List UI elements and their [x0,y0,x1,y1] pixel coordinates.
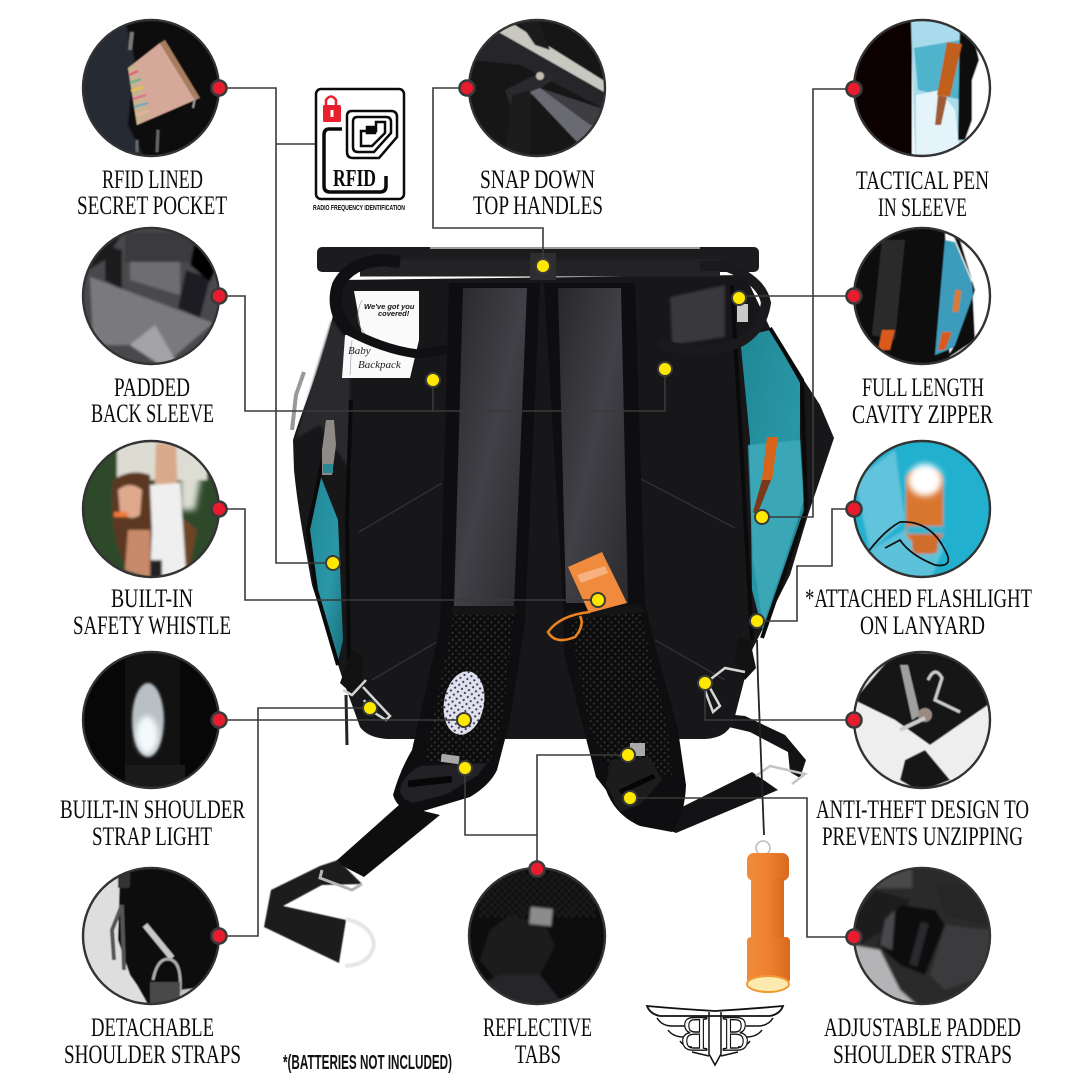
caption: attached flashlight: ON LANYARD [860,611,985,640]
caption: snap down top handles [473,165,603,220]
caption: adjustable padded shoulder straps [824,1013,1021,1069]
caption: snap down top handles: TOP HANDLES [473,191,603,220]
light teal lining [748,440,804,625]
caption: RFID lined secret pocket [77,165,227,220]
caption: attached flashlight [805,584,1032,640]
padded back sleeve connector [219,296,665,411]
buckle left [400,754,487,803]
caption: anti-theft design [816,795,1029,851]
handle loop left [336,260,400,331]
yellow markers on backpack [326,259,769,805]
anti-theft connector [705,683,854,720]
reflective tabs connector [465,755,628,869]
RFID frame bracket [324,129,386,192]
caption: tactical pen: TACTICAL PEN [856,166,989,195]
caption: cavity zipper: FULL LENGTH [862,373,984,402]
teal pocket right [740,330,804,632]
wings [647,1006,783,1016]
shoulder light connector [219,719,464,721]
right strap [544,283,686,832]
left mesh pocket [425,612,514,762]
RFID connector [219,88,333,563]
hang tag [342,291,419,378]
caption: adjustable padded shoulder straps: SHOULDER STRAPS [833,1040,1012,1069]
caption: detachable shoulder straps [64,1013,241,1069]
handle center band [360,260,720,276]
tactical pen connector [762,89,854,517]
snap handles connector [433,88,543,266]
hang tag: Backpack [358,359,402,371]
photo circle: tactical pen [852,18,994,160]
photo circle: reflective tabs [466,866,608,1008]
whistle lanyard [548,612,590,640]
padlock [323,96,341,122]
caption: tactical pen: IN SLEEVE [878,193,967,222]
teal pocket left [308,477,343,662]
caption: padded back sleeve: BACK SLEEVE [91,399,214,428]
handle front over tag [349,331,449,354]
caption: reflective tabs [483,1013,592,1069]
hang tag: We've got you [364,302,415,311]
caption: cavity zipper [852,373,993,429]
connector lines [219,88,854,937]
mirrored letter B: B [681,1005,708,1061]
right carabiner [703,637,756,712]
antenna rings [347,111,397,158]
footnote: batteries not included: *(BATTERIES NOT INCLUDED) [283,1052,452,1074]
whistle connector [219,509,598,600]
left carabiner [340,650,390,745]
right mesh pocket [568,612,672,775]
caption: reflective tabs: REFLECTIVE [483,1013,592,1042]
zipper pull top right [737,304,748,322]
bag body [293,275,834,739]
caption: padded back sleeve: PADDED [114,373,190,402]
orange whistle [568,552,627,613]
BTB winged logo [647,1005,783,1065]
photo circle: flashlight on lanyard [852,440,994,580]
right strap grey inset [558,288,628,603]
photo circle: detachable strap clip [80,866,222,1010]
photo circle: wallet in pocket [80,18,222,160]
photo circle: cavity zipper [852,226,994,368]
zipper pull left [322,420,336,475]
caption: safety whistle: BUILT-IN [111,584,193,613]
hang tag: Baby [348,345,371,357]
left strap grey inset [454,288,527,607]
left side panel sheen [296,320,350,470]
letter B: B [722,1005,749,1061]
flashlight connector [757,509,854,621]
tactical pen on bag [753,437,778,515]
caption: padded back sleeve [91,373,214,428]
top zipper sliver [430,247,700,249]
caption: shoulder strap light: BUILT-IN SHOULDER [60,795,245,824]
left strap [393,283,540,812]
handle center tab [530,253,556,280]
caption: detachable shoulder straps: SHOULDER STRAPS [64,1040,241,1069]
quilting seams [359,478,735,680]
strap tail right [630,712,806,833]
RFID caption: RADIO FREQUENCY IDENTIFICATION [313,203,405,212]
caption: reflective tabs: TABS [515,1040,561,1069]
caption: snap down top handles: SNAP DOWN [480,165,595,194]
flashlight lanyard cord [757,640,764,835]
cavity zipper connector [738,295,854,297]
caption: safety whistle [73,584,231,640]
caption: shoulder strap light: STRAP LIGHT [92,822,212,851]
strap tail left [264,805,440,966]
zipper lines [308,285,806,665]
caption: cavity zipper: CAVITY ZIPPER [852,400,993,429]
red markers on photo circles [212,80,862,944]
RFID wordmark: RFID [333,166,376,192]
caption: RFID lined secret pocket: RFID LINED [102,165,203,194]
adjustable strap connector [630,798,854,937]
buckle right [606,743,662,812]
side hook left [292,372,304,430]
top bar [317,247,759,272]
caption: detachable shoulder straps: DETACHABLE [91,1013,214,1042]
backpack illustration [264,247,834,966]
photo circle: adjustable buckle [852,866,994,1008]
upper right pocket [670,285,725,345]
detachable strap connector [219,708,370,936]
caption: RFID lined secret pocket: SECRET POCKET [77,191,227,220]
photo circle: snap handles [466,18,608,160]
photo circle: padded sleeve [80,226,222,368]
hang tag: covered! [378,309,410,318]
caption: safety whistle: SAFETY WHISTLE [73,611,231,640]
caption: tactical pen [856,166,989,222]
photo circle: anti-theft clip [852,650,995,792]
photo circle: woman with whistle [80,440,222,580]
loose orange flashlight [747,841,790,992]
elastic bands [452,604,644,620]
handle loop right [659,266,766,350]
reflective oval [439,668,489,738]
RFID badge icon [313,89,405,212]
caption: shoulder strap light [60,795,245,851]
photo circle: strap light [80,650,222,790]
